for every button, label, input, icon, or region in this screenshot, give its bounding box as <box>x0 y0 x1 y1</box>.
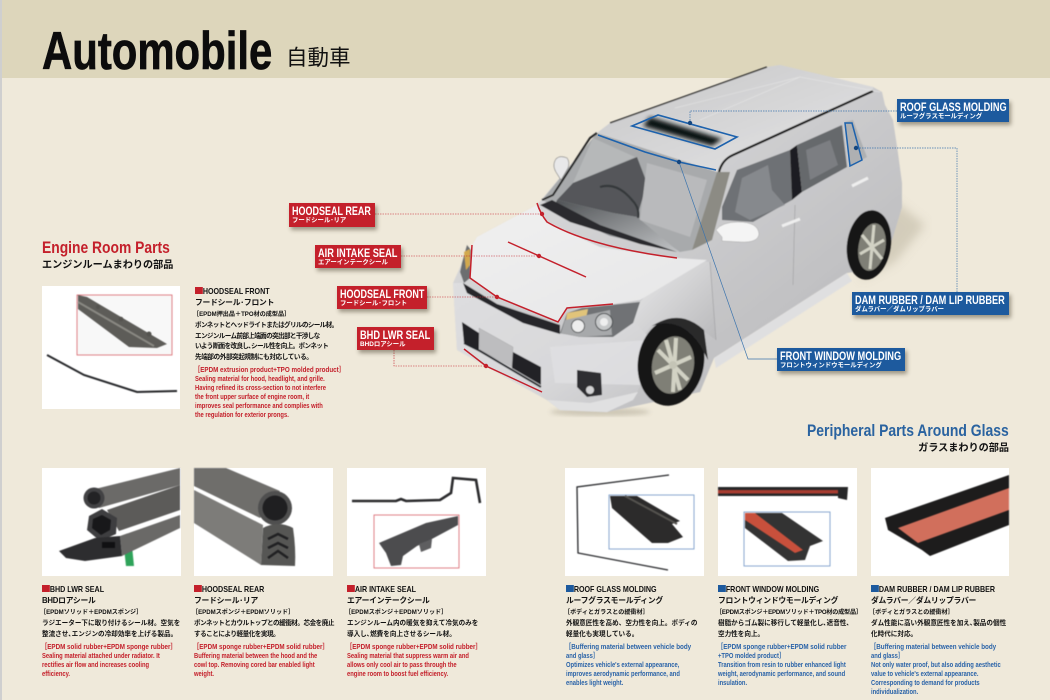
text: bhd lwr seal <box>40 584 180 678</box>
text: front window molding: ［EPDMスポンジ＋EPDMソリッド＋TPO材の成型品］ <box>716 609 862 616</box>
text: dam rubber: individualization. <box>871 686 918 696</box>
text: air intake seal: ［EPDMスポンジ＋EPDMソリッド］ <box>345 609 447 616</box>
text: roof glass molding: ［ボディとガラスとの緩衝材］ <box>564 609 649 616</box>
photo: roof glass molding <box>565 468 704 576</box>
seal: roof glass molding <box>632 115 737 149</box>
text: hoodseal rear: することにより軽量化を実現。 <box>194 630 279 638</box>
label: air intake seal: AIR INTAKE SEAL <box>318 246 397 260</box>
left edge <box>0 0 2 700</box>
text: bhd lwr seal: BHDロアシール <box>42 596 96 604</box>
text: air intake seal <box>345 584 481 678</box>
text: front window molding: フロントウィンドウモールディング <box>718 596 838 604</box>
text: hoodseal front: エンジンルーム前部上端面の突出部と干渉しな <box>195 332 320 340</box>
text: front window molding: insulation. <box>718 678 747 686</box>
text: bhd lwr seal: rectifies air flow and increases cooling <box>42 660 149 668</box>
header band <box>0 0 1050 78</box>
label: hoodseal front: フードシール･フロント <box>340 300 407 306</box>
text: air intake seal: 導入し､燃費を向上させるシール材。 <box>347 630 456 638</box>
seal: dam rubber <box>845 123 862 166</box>
text: dam rubber: Corresponding to demand for products <box>871 678 980 686</box>
item title: DAM RUBBER / DAM LIP RUBBER <box>879 584 995 594</box>
text: air intake seal: ［EPDM sponge rubber+EPDM solid rubber］ <box>346 642 481 650</box>
leader dots <box>484 121 858 368</box>
text: roof glass molding: improves aerodynamic performance, and <box>566 668 680 678</box>
text: hoodseal front: the front upper surface of engine room, it <box>195 392 309 400</box>
text: roof glass molding: Optimizes vehicle's external appearance, <box>566 660 679 668</box>
text: dam rubber: Not only water proof, but also adding aesthetic <box>871 660 1001 668</box>
text: bhd lwr seal: efficiency. <box>42 668 70 678</box>
label: hoodseal rear: フードシール･リア <box>292 216 346 224</box>
text: roof glass molding: enables light weight. <box>566 678 623 686</box>
label: hoodseal rear <box>289 203 375 227</box>
text: bhd lwr seal: ［EPDMソリッド＋EPDMスポンジ］ <box>40 609 142 616</box>
text: hoodseal rear: ［EPDM sponge rubber+EPDM solid rubber］ <box>192 642 328 650</box>
text: front window molding <box>716 584 862 686</box>
photo: air intake seal <box>347 468 486 576</box>
text: roof glass molding: 外観意匠性を高め、空力性を向上。ボディの <box>566 620 697 627</box>
text: roof glass molding: 軽量化も実現している。 <box>566 630 638 638</box>
text: hoodseal rear <box>192 584 334 678</box>
text: roof glass molding: ルーフグラスモールディング <box>566 596 663 604</box>
text: roof glass molding: and glass］ <box>566 650 599 660</box>
text: bhd lwr seal: ［EPDM solid rubber+EPDM sponge rubber］ <box>40 642 176 650</box>
text: hoodseal front: the regulation for exterior prongs. <box>195 410 289 418</box>
leader lines red <box>375 214 542 366</box>
text: hoodseal front <box>193 118 714 418</box>
text: bhd lwr seal: Sealing material attached under radiator. It <box>42 650 160 660</box>
item title: BHD LWR SEAL <box>50 584 104 594</box>
text: roof glass molding: ［Buffering material between vehicle body <box>564 642 691 650</box>
text: dam rubber: and glass］ <box>871 650 904 660</box>
text: hoodseal rear: Buffering material between the hood and the <box>194 650 317 660</box>
label: dam rubber: DAM RUBBER / DAM LIP RUBBER <box>855 293 1005 307</box>
text: air intake seal: engine room to boost fuel efficiency. <box>347 668 448 678</box>
seal: air intake <box>508 242 586 277</box>
text: bhd lwr seal: ラジエーター下に取り付けるシール材。空気を <box>42 620 180 627</box>
text: air intake seal: エアーインテークシール <box>347 596 430 604</box>
text: front window molding: weight, aerodynamic performance, and sound <box>718 668 845 678</box>
text: hoodseal rear: cowl top. Removing cored bar enabled light <box>194 660 315 668</box>
item title: AIR INTAKE SEAL <box>355 584 416 594</box>
photo: front window molding <box>718 468 857 576</box>
text: front window molding: Transition from resin to rubber enhanced light <box>718 660 846 668</box>
label: air intake seal <box>315 245 401 268</box>
label: roof glass molding: ルーフグラスモールディング <box>900 112 982 120</box>
text: hoodseal front: ［EPDM extrusion product+TPO molded product］ <box>194 364 344 374</box>
car <box>453 65 925 416</box>
photo: bhd lwr seal <box>42 468 181 576</box>
seal: front window molding <box>598 135 716 170</box>
item title: HOODSEAL FRONT <box>203 286 270 296</box>
text: hoodseal front: Sealing material for hood, headlight, and grille. <box>195 374 325 382</box>
item title: FRONT WINDOW MOLDING <box>726 584 819 594</box>
heading latin: Peripheral Parts Around Glass <box>807 422 1009 440</box>
text: bhd lwr seal: 整流させ､エンジンの冷却効率を上げる製品。 <box>42 630 177 638</box>
leader lines blue <box>679 111 957 359</box>
label: roof glass molding <box>897 99 1009 122</box>
text: air intake seal: allows only cool air to pass through the <box>347 660 457 668</box>
text: air intake seal: エンジンルーム内の暖気を抑えて冷気のみを <box>347 620 478 627</box>
photo: hoodseal front <box>42 286 180 409</box>
text: dam rubber: 化時代に対応。 <box>871 630 917 638</box>
text: hoodseal rear: ［EPDMスポンジ＋EPDMソリッド］ <box>192 609 294 616</box>
photo: hoodseal rear <box>194 468 333 576</box>
text: front window molding: 樹脂からゴム製に移行して軽量化し､遮音性､ <box>718 620 850 627</box>
text: hoodseal front: フードシール･フロント <box>195 298 274 306</box>
title latin: Automobile <box>42 22 272 81</box>
title japanese: 自動車 <box>286 46 351 70</box>
text: air intake seal: Sealing material that suppress warm air and <box>347 650 469 660</box>
text: dam rubber: value to vehicle's external appearance. <box>871 668 979 678</box>
label: front window molding <box>777 348 905 371</box>
text: hoodseal front: improves seal performance and complies with <box>195 400 323 410</box>
label: dam rubber <box>852 292 1009 315</box>
heading japanese: エンジンルームまわりの部品 <box>42 260 173 271</box>
text: dam rubber <box>869 584 1006 696</box>
seal: hoodseal front <box>470 245 613 322</box>
text: dam rubber: ［ボディとガラスとの緩衝材］ <box>869 609 954 616</box>
text: hoodseal rear: フードシール･リア <box>194 596 258 604</box>
label: front window molding: フロントウィンドウモールディング <box>780 362 882 368</box>
text: hoodseal rear: weight. <box>194 668 214 678</box>
label: bhd lwr seal: BHD LWR SEAL <box>360 328 430 342</box>
text: front window molding: ［EPDM sponge rubber+EPDM solid rubber <box>716 642 846 650</box>
seal: hoodseal rear <box>537 203 677 258</box>
text: front window molding: 空力性を向上。 <box>718 630 764 638</box>
photo: dam rubber <box>871 468 1009 576</box>
label: hoodseal rear: HOODSEAL REAR <box>292 204 371 218</box>
label: bhd lwr seal: BHDロアシール <box>360 340 406 348</box>
text: dam rubber: ［Buffering material between vehicle body <box>870 642 996 650</box>
text: hoodseal front: 先端部の外部突起規制にも対応している。 <box>195 354 312 360</box>
item title: ROOF GLASS MOLDING <box>574 584 657 594</box>
item title: HOODSEAL REAR <box>202 584 264 594</box>
label: bhd lwr seal <box>357 327 434 350</box>
heading latin: Engine Room Parts <box>42 239 170 257</box>
text: hoodseal rear: ボンネットとカウルトップとの緩衝材。芯金を廃止 <box>194 620 334 627</box>
text: hoodseal front: Having refined its cross-section to not interfere <box>195 382 326 392</box>
label: hoodseal front <box>337 286 427 309</box>
label: front window molding: FRONT WINDOW MOLDING <box>780 349 901 363</box>
text: hoodseal front: ［EPDM押出品＋TPO材の成型品］ <box>193 311 290 318</box>
label: air intake seal: エアーインテークシール <box>318 258 388 266</box>
label: roof glass molding: ROOF GLASS MOLDING <box>900 100 1007 114</box>
text: hoodseal front: ボンネットとヘッドライトまたはグリルのシール材。 <box>195 322 338 329</box>
text: dam rubber: ダムラバー／ダムリップラバー <box>871 596 976 604</box>
text: front window molding: +TPO molded product］ <box>718 650 785 660</box>
text: hoodseal front: いよう断面を改良し､シール性を向上。ボンネット <box>195 343 328 350</box>
label: hoodseal front: HOODSEAL FRONT <box>340 287 424 301</box>
seal: bhd lower <box>464 349 542 392</box>
heading: engine room parts <box>42 239 173 271</box>
heading: peripheral parts around glass <box>807 422 1009 454</box>
text: roof glass molding <box>564 584 697 686</box>
label: dam rubber: ダムラバー／ダムリップラバー <box>855 306 944 312</box>
heading japanese: ガラスまわりの部品 <box>918 443 1009 454</box>
text: dam rubber: ダム性能に高い外観意匠性を加え､製品の個性 <box>871 620 1006 627</box>
